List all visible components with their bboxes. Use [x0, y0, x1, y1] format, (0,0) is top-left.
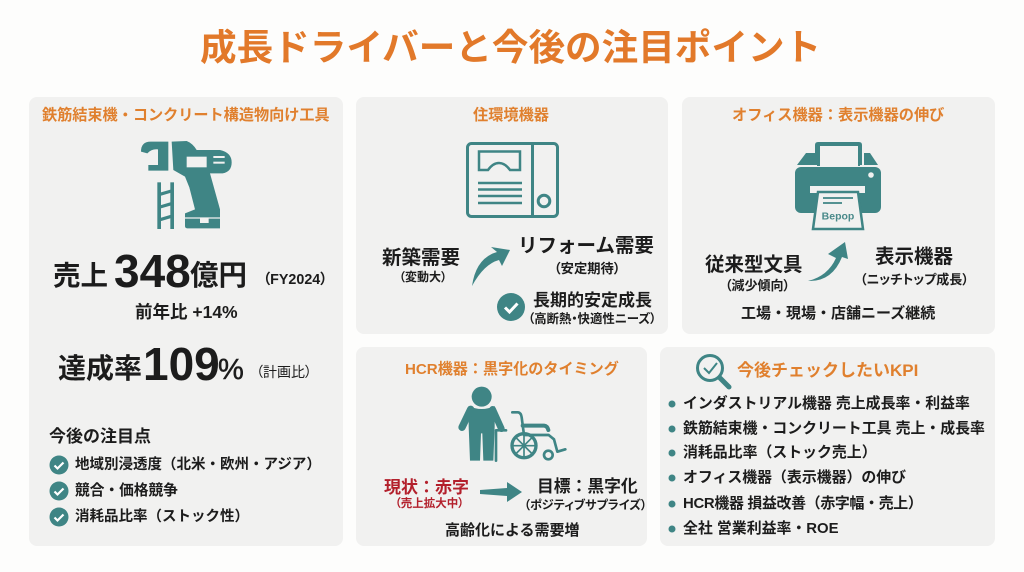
KPI list	[668, 395, 985, 537]
KPI item 5: HCR機器 損益改善（赤字幅・売上）	[683, 496, 922, 512]
text: reform demand: リフォーム需要	[518, 235, 654, 257]
panel: HCR equipment	[356, 347, 647, 546]
check icon 2	[50, 482, 68, 500]
text: factory site store needs: 工場・現場・店舗ニーズ継続	[741, 304, 935, 322]
icon: rebar tying tool	[141, 141, 232, 229]
check icon 3	[50, 508, 68, 526]
panel: office equipment	[682, 97, 995, 334]
panel: housing equipment	[356, 97, 668, 334]
KPI item 4: オフィス機器（表示機器）の伸び	[683, 470, 906, 486]
watch point list	[50, 456, 321, 526]
text: target profitability: 目標：黒字化	[537, 476, 638, 496]
text: current status in the red: 現状：赤字	[384, 478, 469, 496]
year on year growth: 前年比 +14%	[135, 302, 238, 322]
panel heading: housing equipment: 住環境機器	[473, 106, 549, 124]
KPI item 6: 全社 営業利益率・ROE	[683, 521, 839, 537]
text: long term stable growth: 長期的安定成長	[533, 290, 652, 310]
achievement rate: %	[218, 354, 244, 386]
achievement rate: （計画比）	[256, 364, 312, 380]
panel heading: HCR equipment: HCR機器：黒字化のタイミング	[405, 360, 619, 378]
icon: printer: Bepop	[822, 210, 854, 222]
panel heading: office equipment: オフィス機器：表示機器の伸び	[732, 106, 944, 124]
icon: elderly person with cane and wheelchair	[458, 386, 567, 462]
sales figure: 348	[114, 245, 191, 297]
icon: magnifier with check	[696, 354, 732, 390]
achievement rate	[58, 338, 312, 390]
watch point 2: 競合・価格競争	[75, 482, 178, 498]
text: traditional stationery: 従来型文具	[705, 254, 803, 276]
title: 成長ドライバーと今後の注目ポイント	[200, 26, 821, 68]
text: demand growth due to aging: 高齢化による需要増	[445, 522, 580, 538]
arrow: current to target	[480, 482, 522, 502]
watch point 3: 消耗品比率（ストック性）	[75, 509, 249, 525]
text: reform demand note: （安定期待）	[554, 260, 620, 276]
achievement rate: 達成率	[58, 353, 142, 384]
text: niche top growth note: （ニッチトップ成長）	[860, 272, 969, 286]
text: positive surprise note: （ポジティブサプライズ）	[524, 498, 647, 512]
KPI item 1: インダストリアル機器 売上成長率・利益率	[683, 396, 970, 412]
panel: KPI checklist	[660, 347, 995, 546]
panel: rebar tools	[29, 97, 343, 546]
icon: printer	[795, 142, 881, 230]
text: sales expanding note: （売上拡大中）	[395, 498, 464, 510]
arrow: new build to reform	[472, 247, 510, 286]
watch points heading: 今後の注目点	[49, 426, 151, 446]
achievement rate: 109	[143, 338, 220, 390]
text: insulation and comfort needs: （高断熱・快適性ニーズ）	[528, 312, 656, 326]
sales figure: 億円	[190, 260, 247, 292]
KPI bullets	[668, 400, 676, 532]
icon: housing control panel	[466, 142, 559, 218]
sales figure	[53, 245, 327, 297]
panel heading: rebar tools: 鉄筋結束機・コンクリート構造物向け工具	[42, 106, 330, 124]
text: declining trend note: （減少傾向）	[725, 278, 790, 292]
text: display equipment: 表示機器	[875, 246, 953, 268]
check icon 1	[50, 456, 68, 474]
sales figure: 売上	[53, 260, 108, 291]
text: new build demand: 新築需要	[382, 246, 460, 268]
sales figure: （FY2024）	[263, 272, 327, 288]
arrow: stationery to display equipment	[808, 242, 848, 281]
text: new build demand note: （変動大）	[399, 270, 447, 284]
KPI heading: 今後チェックしたいKPI	[737, 361, 918, 380]
watch point 1: 地域別浸透度（北米・欧州・アジア）	[75, 457, 321, 473]
KPI item 3: 消耗品比率（ストック売上）	[683, 445, 877, 461]
KPI item 2: 鉄筋結束機・コンクリート工具 売上・成長率	[683, 421, 985, 437]
icon: check badge	[497, 293, 525, 321]
